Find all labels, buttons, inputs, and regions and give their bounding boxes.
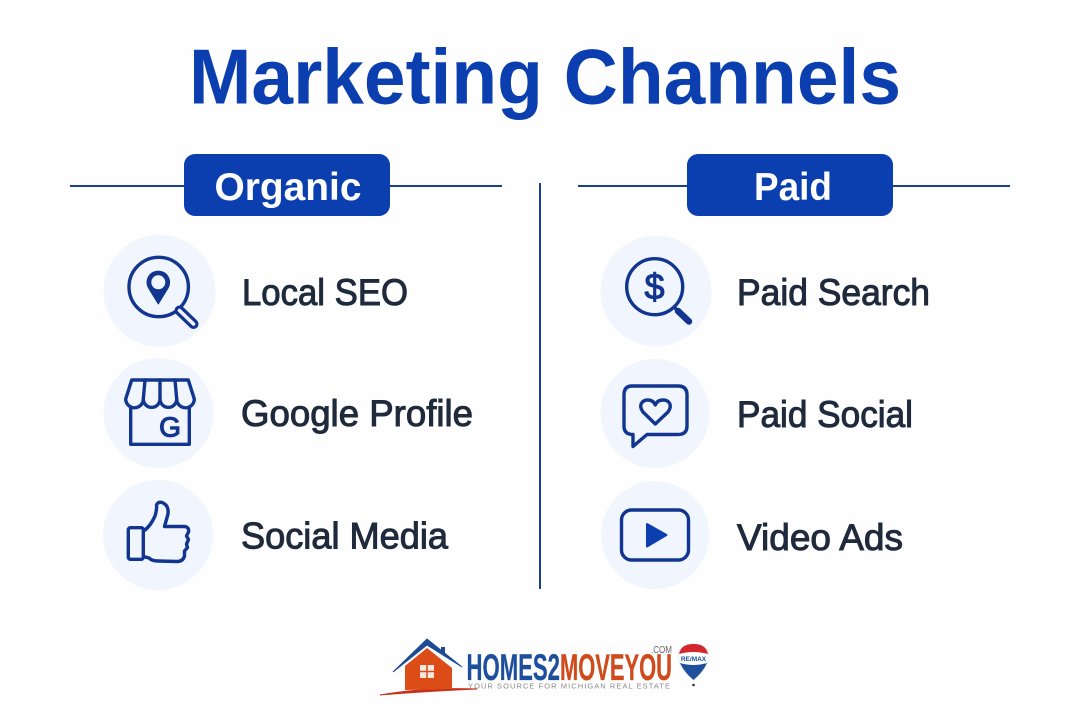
logo wordmark: HOMES2 bbox=[466, 647, 560, 688]
heading: paid bbox=[578, 154, 1010, 216]
label: local seo: Local SEO bbox=[242, 272, 408, 313]
icon: paid social chat heart bbox=[600, 359, 710, 468]
label: paid social: Paid Social bbox=[737, 394, 913, 435]
panel: paid bbox=[578, 154, 1010, 589]
icon: social media thumbs up bbox=[103, 480, 213, 590]
icon: google profile storefront bbox=[104, 358, 214, 468]
icon: re/max balloon: RE/MAX bbox=[681, 656, 707, 663]
logo tagline: YOUR SOURCE FOR MICHIGAN REAL ESTATE bbox=[468, 682, 670, 690]
heading: paid: Paid bbox=[754, 166, 832, 209]
label: google profile: Google Profile bbox=[241, 393, 473, 434]
center divider bbox=[539, 183, 541, 589]
logo: homes2moveyou bbox=[380, 639, 709, 695]
logo domain suffix: .COM bbox=[651, 645, 672, 656]
icon: paid search magnifier with dollar bbox=[600, 236, 712, 346]
heading: organic: Organic bbox=[214, 166, 362, 209]
heading: organic bbox=[70, 154, 502, 216]
title: Marketing Channels bbox=[189, 32, 901, 120]
icon: house bbox=[380, 639, 477, 695]
icon: local seo magnifier with pin bbox=[104, 235, 216, 347]
icon: paid search magnifier with dollar: $ bbox=[644, 266, 665, 307]
icon: google profile storefront: G bbox=[159, 412, 181, 442]
panel: organic bbox=[70, 154, 502, 590]
logo wordmark accent: MOVEYOU bbox=[560, 647, 672, 688]
label: social media: Social Media bbox=[241, 516, 448, 556]
icon: video ads play button bbox=[601, 481, 709, 589]
label: video ads: Video Ads bbox=[737, 517, 903, 558]
label: paid search: Paid Search bbox=[737, 272, 930, 313]
icon: re/max balloon bbox=[678, 644, 709, 686]
